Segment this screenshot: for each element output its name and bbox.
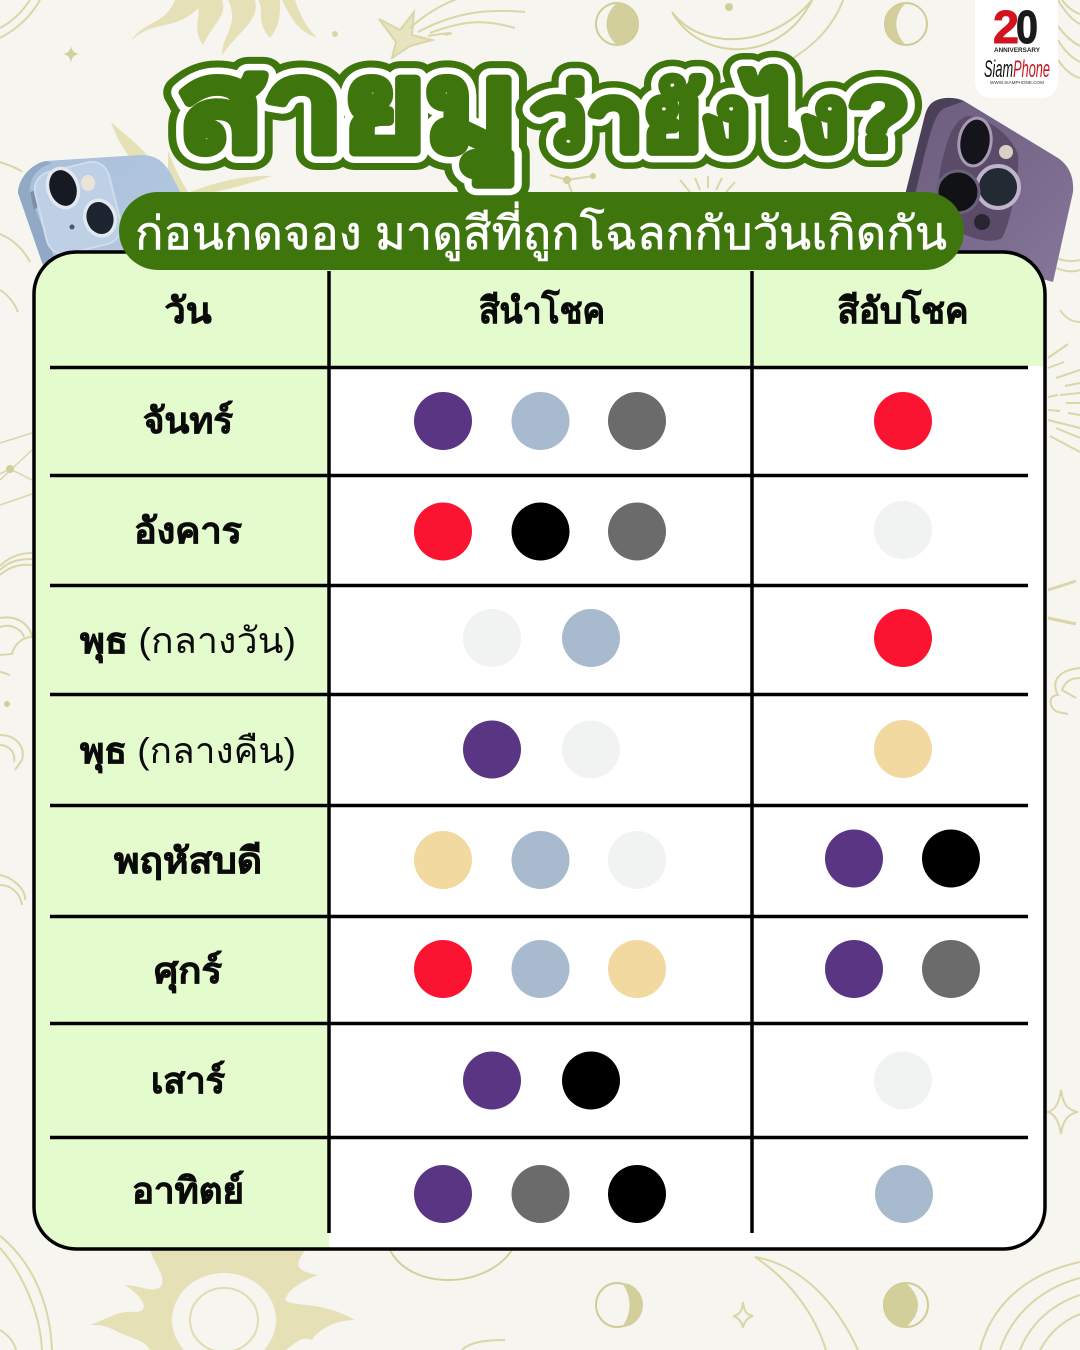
colour dots: Sunday: [414, 1165, 933, 1223]
colour dots: Wednesday night: [463, 720, 932, 778]
logo: SiamPhone 20 anniversary: 2: [993, 1, 1019, 53]
logo: SiamPhone 20 anniversary: ANNIVERSARY: [994, 48, 1040, 54]
panel background: [34, 252, 1045, 1249]
icon: moon bottom right: [884, 1283, 928, 1327]
icon: moon bottom left: [596, 1283, 643, 1327]
icon: sun bottom: [90, 1250, 355, 1350]
icon: moon phase top center: [596, 3, 638, 45]
grid lines: [50, 271, 1028, 1233]
icon: moon phase top right: [885, 3, 927, 45]
row label: Friday: ศุกร์: [154, 950, 223, 994]
title: ว่ายังไง?: [531, 68, 909, 170]
row label: Thursday: พฤหัสบดี: [114, 840, 262, 881]
table panel: [34, 252, 1045, 1249]
logo: SiamPhone 20 anniversary: [975, 0, 1058, 98]
row label: Wednesday day: พุธ (กลางวัน): [80, 620, 296, 664]
panel border: [34, 252, 1045, 1249]
day column fill: [34, 252, 329, 1249]
logo: SiamPhone 20 anniversary: 0: [1016, 1, 1038, 53]
logo: SiamPhone 20 anniversary: WWW.SIAMPHONE.COM: [990, 80, 1044, 85]
colour dots: Tuesday: [414, 501, 932, 560]
icon: crescent bottom: [390, 1250, 512, 1280]
title: ว่ายังไง?: [531, 68, 909, 170]
colour dots: Monday: [414, 392, 932, 450]
colour dots: Wednesday day: [463, 609, 932, 667]
title: สายมู: [178, 39, 518, 184]
right side decorations: [1048, 344, 1080, 452]
row label: Monday: จันทร์: [143, 400, 234, 441]
title: ว่ายังไง?: [531, 68, 909, 170]
row label: Wednesday night: พุธ (กลางคืน): [80, 730, 296, 774]
icon: shooting star: [379, 0, 525, 58]
header row fill: [329, 252, 1045, 366]
icon: sun top: [111, 0, 317, 195]
header: unlucky colours: สีอับโชค: [838, 289, 968, 331]
row label: Tuesday: อังคาร: [134, 510, 243, 551]
colour dots: Friday: [414, 940, 980, 998]
header: lucky colours: สีนำโชค: [479, 289, 605, 331]
icon: blue phone: [18, 155, 192, 268]
colour dots: Saturday: [463, 1052, 932, 1110]
logo: SiamPhone 20 anniversary: SiamPhone: [984, 56, 1050, 83]
title: [178, 39, 909, 184]
icon: constellation: [550, 173, 596, 200]
icon: purple phone: [905, 98, 1073, 282]
header: day: วัน: [164, 290, 212, 331]
table text: [80, 289, 968, 1211]
subtitle banner: [119, 192, 964, 270]
icon: moon crescent top: [672, 0, 812, 49]
title: สายมู: [178, 39, 518, 184]
subtitle banner: ก่อนกดจอง มาดูสีที่ถูกโฉลกกับวันเกิดกัน: [135, 201, 947, 261]
colour dots: Thursday: [414, 830, 980, 889]
row label: Saturday: เสาร์: [151, 1060, 226, 1101]
left side decorations: [0, 162, 30, 312]
icon: sparkle bottom: [733, 1302, 753, 1328]
title: สายมู: [178, 39, 518, 184]
icon: sparkle top-left: [63, 46, 79, 63]
row label: Sunday: อาทิตย์: [132, 1170, 244, 1211]
